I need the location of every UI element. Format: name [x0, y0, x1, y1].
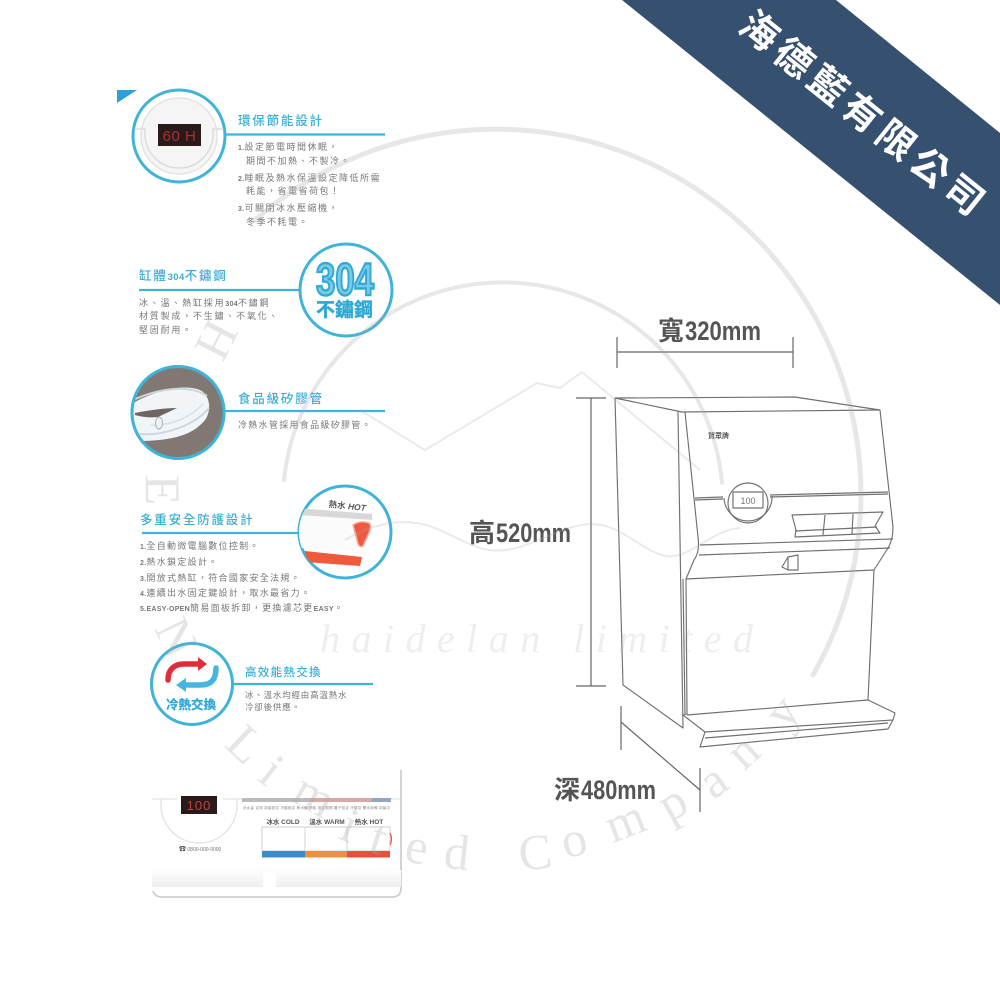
water buttons [792, 512, 883, 537]
text block [140, 540, 344, 613]
text block: 冷熱水管採用食品級矽膠管。 [238, 419, 372, 430]
selection buttons [262, 827, 392, 858]
watermark circular text: i [249, 744, 295, 796]
height dimension [469, 398, 606, 686]
company banner [622, 0, 1000, 305]
panel body [152, 770, 401, 897]
text block: 5.EASY-OPEN簡易面板拆卸，更換濾芯更EASY。 [140, 602, 344, 613]
column labels: 冰水 COLD [266, 817, 300, 826]
watermark circular text: N [144, 608, 210, 666]
heading: 多重安全防護設計 [140, 512, 254, 527]
watermark circular text: d [442, 823, 472, 881]
text block: 3.可關閉冰水壓縮機， [238, 202, 339, 213]
width label: 寬 [658, 316, 684, 346]
text block: 冰、溫水均經由高溫熱水 [245, 690, 347, 700]
icon: 304 badge [300, 244, 392, 336]
watermark script: haidelan limited [320, 616, 755, 661]
watermark circular text: n [714, 722, 770, 780]
text block [245, 690, 347, 712]
text block: 4.連續出水固定鍵設計，取水最省力。 [140, 587, 311, 598]
watermark circular text [135, 311, 811, 882]
depth label: 深 [554, 775, 580, 805]
height dimension: 520mm [496, 518, 571, 548]
watermark circular text: H [184, 311, 250, 369]
company name: 海德藍有限公司 [731, 4, 996, 228]
height label: 高 [469, 518, 495, 548]
panel: silicone tube [130, 365, 385, 461]
watermark circular text: a [687, 751, 738, 809]
line drawing: water dispenser [615, 397, 895, 747]
icon: 304 badge: 不鏽鋼 [316, 298, 373, 321]
panel: 304 stainless [139, 244, 392, 336]
display [181, 796, 217, 814]
icon: hot button: 熱水 HOT [328, 499, 367, 513]
text block [238, 141, 381, 227]
heading: 高效能熱交換 [245, 665, 322, 679]
column labels: 熱水 HOT [355, 817, 383, 826]
watermark circular text: t [364, 808, 394, 866]
text block: 3.開放式熱缸，符合國家安全法規。 [140, 572, 301, 583]
watermark circular text: E [135, 475, 191, 505]
heading: 缸體304不鏽鋼 [139, 268, 228, 283]
watermark circular text: i [333, 797, 367, 853]
icon: exchange arrows: 冷熱交換 [166, 697, 216, 712]
dial: 100 [740, 496, 756, 506]
heading: 食品級矽膠管 [238, 391, 324, 406]
watermark circular text: m [284, 761, 346, 829]
watermark circular text: L [216, 713, 276, 775]
text block: 冷卻後供應。 [245, 702, 301, 712]
watermark circular text: e [401, 816, 434, 876]
watermark circular text: m [597, 787, 653, 854]
lower band [152, 870, 401, 888]
icon: display dial [133, 90, 225, 182]
panel: control panel close-up [152, 770, 401, 897]
text block: 2.睡眠及熱水保溫設定降低所需 [238, 172, 381, 183]
depth dimension [554, 706, 700, 812]
watermark circular text: y [752, 684, 811, 739]
panel: energy saving [133, 90, 385, 227]
display: 100 [187, 798, 211, 813]
panel: heat exchange [152, 644, 373, 724]
icon: tube photo [130, 365, 226, 461]
dial [724, 483, 772, 523]
hotline: ☎ 0800-000-9000 [179, 846, 222, 853]
watermark circular text: C [515, 822, 555, 882]
depth dimension: 480mm [581, 775, 656, 805]
column labels: 溫水 WARM [309, 817, 345, 826]
text block: 堅固耐用。 [139, 324, 193, 335]
text block: 1.設定節電時間休眠， [238, 141, 339, 152]
icon: exchange arrows [152, 644, 232, 724]
text block: 期間不加熱、不製冷。 [246, 155, 351, 166]
text block: 1.全自動微電腦數位控制。 [140, 540, 260, 551]
icon: hot button [298, 486, 391, 578]
handle [782, 555, 798, 570]
text block: 冰、溫、熱缸採用304不鏽鋼 [139, 297, 270, 308]
heading: 環保節能設計 [238, 113, 324, 128]
indicator strip: 出水量 定時 抑菌設定 冷壓設定 熱水鎖 節能 設定期間 離子設定 冷壓控 開水設備 抑菌中 [243, 805, 390, 810]
icon: 304 badge: 304 [316, 254, 374, 305]
indicator strip [242, 798, 391, 810]
text block: 材質製成，不生鏽、不氧化、 [139, 310, 279, 321]
icon: display dial: 60 H [163, 128, 196, 145]
text block: 2.熱水鎖定設計。 [140, 556, 219, 567]
column labels [266, 817, 383, 826]
watermark [135, 129, 861, 882]
brand name: 賀眾牌 [708, 431, 729, 440]
width dimension [617, 316, 793, 368]
watermark circular text: o [555, 809, 592, 869]
panel: safety [140, 486, 391, 613]
watermark circular text: p [648, 771, 697, 832]
text block: 冬季不耗電。 [246, 216, 309, 227]
width dimension: 320mm [685, 316, 761, 346]
text block [139, 297, 279, 335]
text block: 耗能，省電省荷包！ [246, 185, 341, 196]
corner marker triangle [117, 90, 137, 103]
